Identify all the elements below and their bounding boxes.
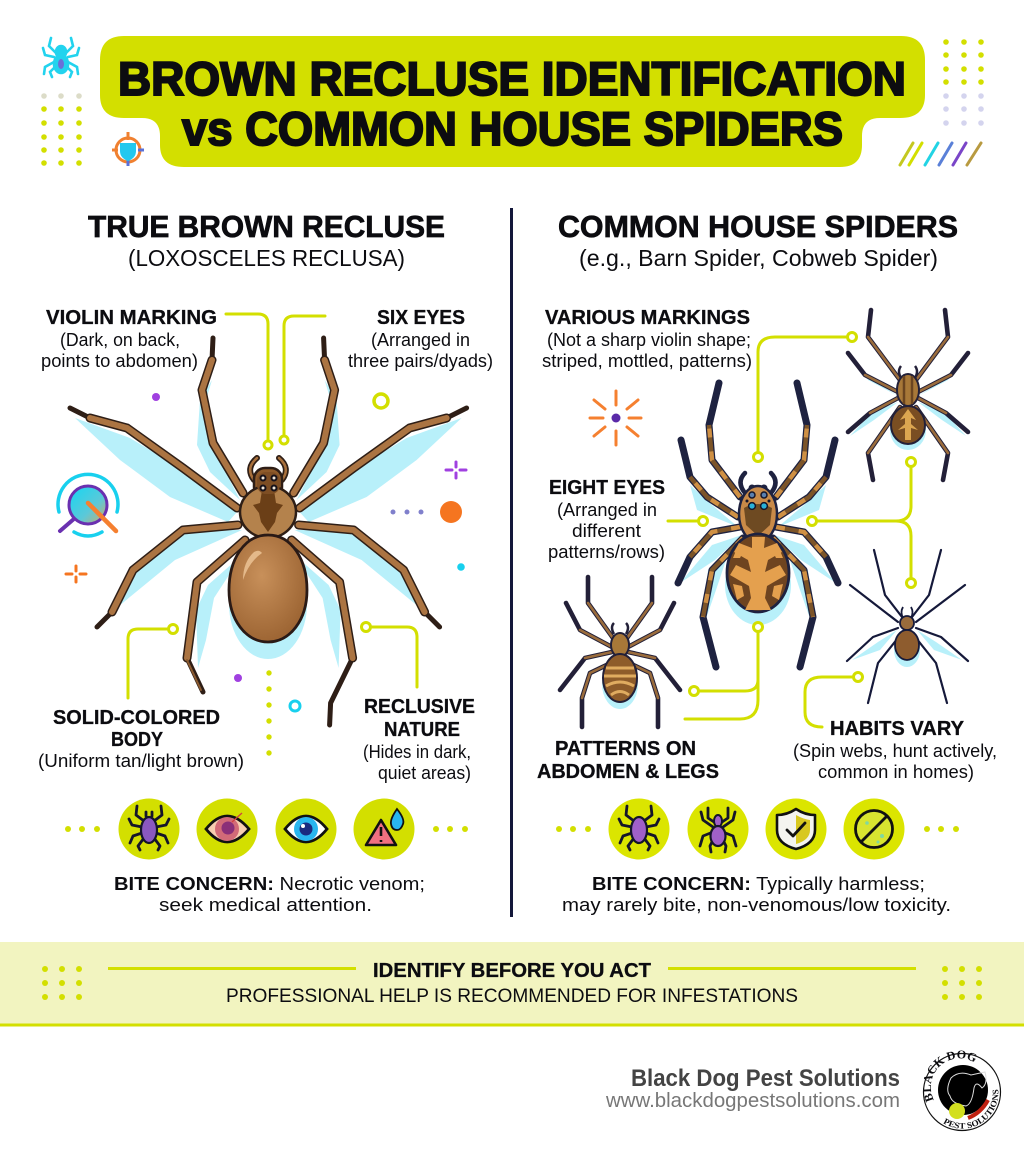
label: reclusive nature: (Hides in dark, (363, 742, 471, 762)
label: habits vary: (Spin webs, hunt actively, (793, 741, 997, 761)
title text (118, 52, 906, 155)
heading: common house spiders (558, 209, 958, 271)
dots: right row (556, 826, 959, 832)
small spider: bottom right (847, 550, 968, 703)
heading: true brown recluse (88, 209, 445, 271)
icon: sunburst (590, 391, 641, 445)
legs (560, 577, 680, 727)
icon: tick purple (608, 798, 670, 860)
body (603, 623, 637, 702)
dot grid: header right (943, 39, 984, 126)
label: six eyes: (Arranged in (371, 330, 470, 350)
cyan shadow (602, 659, 638, 709)
panel: common house spiders (537, 209, 997, 915)
label: six eyes (348, 307, 493, 371)
bite concern: brown recluse (114, 873, 425, 915)
label: solid-colored body: BODY (111, 729, 164, 751)
icon: blue eye (276, 798, 336, 860)
footer brand text: Black Dog Pest Solutions (631, 1065, 900, 1092)
logo: black dog: PEST SOLUTIONS (943, 1090, 998, 1129)
icon: tick (118, 798, 180, 860)
label: eight eyes: EIGHT EYES (549, 477, 665, 499)
label: reclusive nature (363, 696, 475, 783)
icon: warning and drop (354, 798, 414, 860)
spider legs (70, 338, 467, 725)
label: patterns on abdomen and legs: PATTERNS ON (555, 738, 696, 760)
label: various markings: VARIOUS MARKINGS (545, 307, 750, 329)
logo: black dog (922, 1050, 1002, 1132)
label: habits vary: HABITS VARY (830, 718, 965, 740)
panel: true brown recluse (38, 209, 493, 915)
label: habits vary (793, 718, 997, 782)
banner text: PROFESSIONAL HELP IS RECOMMENDED FOR INFESTATIONS (226, 985, 798, 1007)
small spider: bottom left (560, 577, 680, 727)
large patterned spider (678, 383, 838, 667)
label: reclusive nature: NATURE (384, 719, 460, 741)
icon: magnifying glass (58, 474, 118, 536)
legs (678, 383, 838, 667)
label: violin marking: (Dark, on back, (60, 330, 180, 350)
label: patterns on abdomen and legs (537, 738, 719, 783)
connectors: house spiders (668, 332, 916, 727)
cephalothorax (240, 486, 296, 538)
thin legs (847, 550, 968, 703)
banner text (226, 960, 798, 1007)
decorative coloured stripes (900, 143, 981, 165)
body (891, 366, 925, 444)
label: violin marking: points to abdomen) (41, 351, 198, 371)
abdomen (229, 535, 307, 642)
patterned abdomen (727, 534, 789, 612)
decorative marks (66, 393, 466, 756)
label: eight eyes (548, 477, 665, 562)
cyan shadow (680, 485, 836, 630)
dot grid: header left (41, 93, 82, 166)
icon: target (112, 132, 144, 166)
icon: spider purple (688, 798, 748, 860)
label: violin marking (41, 307, 217, 371)
bite concern: house spiders: BITE CONCERN: Typically harmless; (592, 873, 925, 894)
large brown recluse spider (70, 338, 467, 725)
fangs and head (250, 458, 286, 498)
label: various markings (542, 307, 752, 371)
bite concern: house spiders: may rarely bite, non-venomous/low toxicity. (562, 894, 951, 915)
cyan shadow (850, 356, 966, 450)
centre divider (510, 208, 513, 917)
bottom banner (0, 942, 1024, 1026)
heading: true brown recluse: (LOXOSCELES RECLUSA) (128, 245, 405, 271)
label: solid-colored body (38, 707, 244, 771)
logo: black dog: BLACK DOG (923, 1050, 976, 1103)
icon: shield with check (766, 798, 826, 860)
cyan shadow (852, 630, 962, 667)
label: violin marking: VIOLIN MARKING (46, 307, 217, 329)
body (895, 607, 919, 660)
footer brand text (605, 1065, 900, 1112)
bite concern: house spiders (562, 873, 951, 915)
label: eight eyes: different (572, 521, 641, 541)
callout connectors (128, 314, 417, 698)
heading: true brown recluse: TRUE BROWN RECLUSE (88, 209, 445, 244)
banner text: IDENTIFY BEFORE YOU ACT (373, 960, 651, 982)
legs (848, 310, 968, 480)
label: six eyes: SIX EYES (377, 307, 465, 329)
bite concern: brown recluse: BITE CONCERN: Necrotic venom; (114, 873, 425, 894)
small spider: top right (848, 310, 968, 480)
heading: common house spiders: COMMON HOUSE SPIDERS (558, 209, 958, 244)
label: six eyes: three pairs/dyads) (348, 351, 493, 371)
label: various markings: striped, mottled, patterns) (542, 351, 752, 371)
label: habits vary: common in homes) (818, 762, 974, 782)
icon: prohibition sign (844, 798, 904, 860)
cyan shadow (75, 380, 462, 668)
bite concern: brown recluse: seek medical attention. (159, 894, 372, 915)
icon: necrotic eye (196, 798, 258, 860)
icon: cyan spider (43, 38, 79, 77)
label: eight eyes: (Arranged in (557, 500, 657, 520)
title text: BROWN RECLUSE IDENTIFICATION (118, 52, 906, 105)
label: various markings: (Not a sharp violin shape; (547, 330, 751, 350)
body and eyes (739, 473, 777, 542)
dots: left row (65, 826, 468, 832)
title banner (100, 36, 925, 167)
title text: vs COMMON HOUSE SPIDERS (182, 102, 843, 155)
label: reclusive nature: RECLUSIVE (364, 696, 475, 718)
heading: common house spiders: (e.g., Barn Spider, Cobweb Spider) (579, 245, 938, 271)
label: eight eyes: patterns/rows) (548, 542, 665, 562)
label: reclusive nature: quiet areas) (378, 763, 471, 783)
footer brand text: www.blackdogpestsolutions.com (605, 1090, 900, 1112)
label: solid-colored body: (Uniform tan/light brown) (38, 751, 244, 771)
label: solid-colored body: SOLID-COLORED (53, 707, 220, 729)
eyes and violin marking (253, 472, 283, 532)
label: patterns on abdomen and legs: ABDOMEN & LEGS (537, 761, 719, 783)
